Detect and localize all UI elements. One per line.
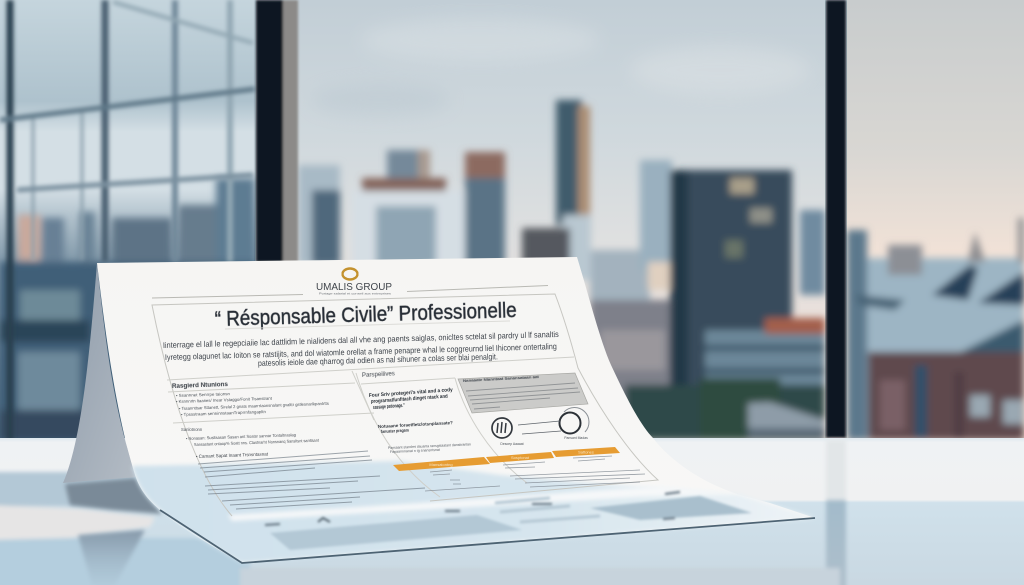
- diagram: circles and arrows: Pansant Madas: [564, 436, 588, 440]
- bullets: • Tpssstraam senninnstaanTraprrnfangapltn: [181, 409, 267, 417]
- bullets: • Ksnnnrtn ltaanes/ Inear Vstaggo/Fonit Tisanstrant: [176, 396, 273, 404]
- page dark bottom edge: [160, 510, 815, 563]
- content frame: [152, 294, 658, 516]
- arrows: [518, 421, 561, 434]
- shadow tint on lower page: [132, 461, 815, 563]
- orange band 3: Sattones: [578, 450, 594, 454]
- note: Pansaant standret dsuanta ransgstaatant dansttranlan: [388, 442, 471, 450]
- bullets: [176, 391, 329, 417]
- top rules: [152, 286, 548, 298]
- company name: UMALIS GROUP: [316, 281, 392, 293]
- flap shadow on table: [65, 478, 162, 514]
- orange band 2: Sosptonat: [511, 455, 530, 460]
- captions: Desoep Aaaaat: [500, 442, 524, 446]
- quote: Four Sriv protegeri's vital and a cody: [369, 387, 453, 399]
- background: left window reflection: [0, 0, 255, 440]
- lower strip panels: [265, 492, 752, 550]
- intro text: [163, 330, 559, 368]
- intro text: Iyretegg olagunet lac Ioiton se ratstijits, and dol wiatomle orellat a frame penapre whal le coggreurnd liel Ihiconer ontertaling: [165, 342, 557, 362]
- background: window mullions left: [0, 0, 255, 440]
- panel: insurance list: Sansastant ontaop% Soatt nns. Ctastnarht Nonsnanq Sansltsnt sanltsant: [194, 438, 320, 447]
- logo: [316, 268, 392, 296]
- bullets: • Tssannttsar Sttanett, Sirelal 2 gnats maarrrtaonsnalant gvalttr gstlesnarlkpantrtts: [179, 401, 329, 411]
- callout: grey box: Nanaaate Nlanntaat Sanansataan aat: [463, 375, 540, 383]
- title underline: [225, 321, 510, 329]
- beige light band: [0, 505, 155, 540]
- document page: [97, 257, 815, 563]
- table: reflections: [0, 440, 846, 585]
- panel: required missions: [167, 357, 574, 423]
- quote: [369, 387, 453, 411]
- text beneath orange bands: [425, 456, 645, 491]
- left pale blue lower table: [0, 538, 250, 585]
- panel: insurance list: • Nonasan: Susltsasan Sasan ant Soatsr sannar Tontaltnaslag: [186, 432, 297, 441]
- intro text: Iinterrage el lall le regepciaiie lac dattlidm le nialidens dal all vhe ang paents saiglas, onicltes sctelat sil pardry ul lf sanaltis: [163, 330, 559, 350]
- background: clouds: [310, 18, 810, 116]
- window column right: [826, 0, 846, 438]
- background: right sky: [847, 0, 1024, 440]
- note: Fapaannnanat n tg snansntsnat: [390, 448, 440, 454]
- left blue band: [0, 472, 230, 506]
- subheading: Notuaane foraetfletclotsnplansate?: [378, 420, 453, 429]
- background: sky: [0, 0, 1024, 440]
- logo mark: [342, 268, 358, 280]
- white band above lower strip: [228, 486, 735, 521]
- orange band 1: Mansatontng: [429, 462, 453, 467]
- quote: sassage pationage.”: [373, 403, 405, 411]
- background: left window buildings: [0, 178, 255, 442]
- window column left: [256, 0, 298, 262]
- table surface: [0, 438, 1024, 585]
- document: back fold: [63, 263, 137, 483]
- orange headers: [393, 447, 620, 471]
- subheading: [378, 420, 453, 434]
- left circle: [492, 418, 512, 438]
- orange band 3: [552, 447, 620, 457]
- background: blurred city skyline: [298, 100, 825, 440]
- panel: insurance list: Sanlotnonn: [181, 427, 203, 432]
- right circle: [560, 412, 580, 434]
- orange band 2: [486, 452, 554, 463]
- subheading: fanuater pragam: [381, 428, 409, 434]
- heading: Rasgierd Ntunions: [172, 381, 228, 390]
- panel: insurance list: • Camant Sapat Inaant Trsnsntasnat: [196, 451, 269, 459]
- title: “ Résponsable Civile” Professionelle: [214, 298, 517, 331]
- diagram: circles and arrows: [492, 408, 589, 446]
- callout: grey box: [458, 373, 588, 413]
- quote: prograrnatfunfitach dinget ntack and: [371, 394, 448, 405]
- intro text: patesolis ieiole dae qharrog dal odien as nal sihuner a colas ser blai penalgit.: [258, 352, 498, 368]
- background: right-hand buildings: [847, 218, 1024, 440]
- reflected column right: [826, 500, 846, 585]
- table: reflection of flap: [78, 530, 145, 585]
- panel: insurance list: [181, 427, 425, 509]
- heading: Parspeilives: [362, 371, 395, 379]
- logo: Portage salarial et conseil aux entreprises: [319, 292, 392, 296]
- orange band 1: [393, 457, 490, 471]
- panel: perspectives: [356, 371, 527, 497]
- bullets: • Ssannnet Senrrpe taionsn: [176, 391, 231, 398]
- note: [388, 442, 471, 454]
- lower bottom tone: [240, 568, 840, 585]
